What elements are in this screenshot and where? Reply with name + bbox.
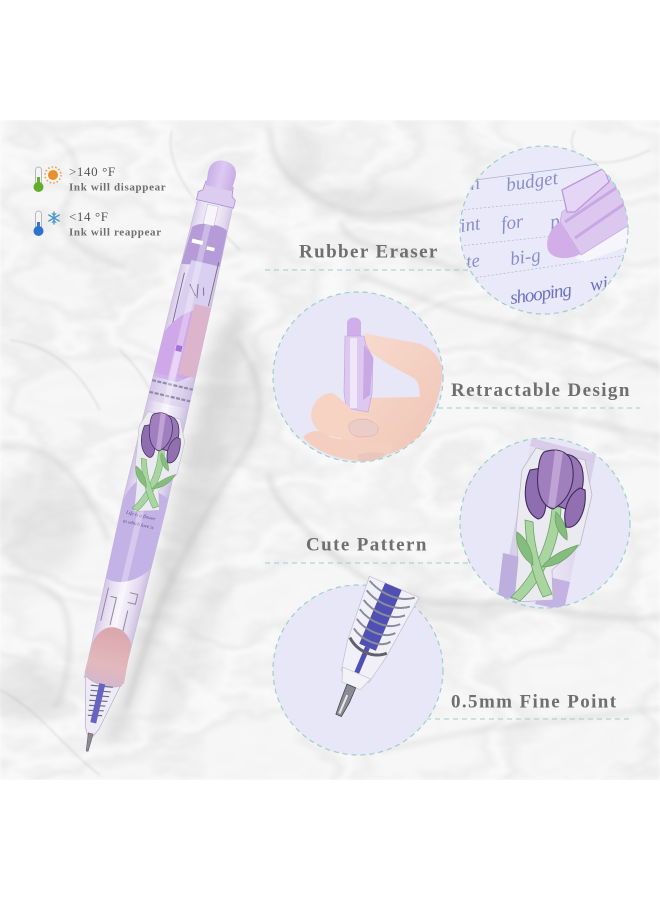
pen peach strip xyxy=(178,304,212,378)
handwriting xyxy=(461,173,606,304)
metal point xyxy=(334,684,356,717)
full pen xyxy=(84,160,236,752)
heading: above 140 F: >140 °F xyxy=(69,164,116,179)
handwriting: bi-g xyxy=(509,245,542,270)
dashed leader lines xyxy=(265,270,640,719)
notebook paper xyxy=(459,146,634,314)
heading: below 14 F: <14 °F xyxy=(69,209,109,224)
circle: cute pattern xyxy=(460,438,630,610)
circle: retractable design xyxy=(273,292,443,462)
handwriting: shooping xyxy=(509,280,573,309)
pen shadow xyxy=(105,300,250,745)
handwriting: budget xyxy=(505,168,560,196)
icon: snowflake xyxy=(49,212,59,224)
pen lilac panel xyxy=(174,260,217,318)
hand and thumb xyxy=(340,333,442,456)
lower fingernail xyxy=(358,452,385,461)
pen collar xyxy=(191,180,238,230)
icon: cold thermometer xyxy=(34,211,44,236)
marble background xyxy=(0,120,660,780)
pen end on paper xyxy=(547,165,634,258)
pen upper purple panel xyxy=(182,224,227,266)
pen mauve blob xyxy=(154,311,193,382)
pen lower purple blob xyxy=(106,482,168,582)
tulip close-up xyxy=(511,448,592,602)
barrel printed decoration xyxy=(100,224,227,632)
handwriting: for xyxy=(500,211,525,235)
text: ink will disappear: Ink will disappear xyxy=(69,182,166,194)
circle: fine point xyxy=(273,576,443,755)
handwriting: te xyxy=(465,250,481,273)
handwriting: int xyxy=(459,213,482,237)
collar xyxy=(337,667,370,692)
pen barrel xyxy=(81,199,236,687)
fingernail xyxy=(349,419,378,437)
pen spring xyxy=(83,681,113,725)
handwriting: n xyxy=(469,173,481,195)
handwriting: p xyxy=(547,211,561,233)
pen highlight xyxy=(121,224,211,582)
circle: rubber eraser xyxy=(459,146,634,314)
handwriting: wi xyxy=(589,273,609,296)
shadow below eraser xyxy=(576,227,628,262)
label: fine point: 0.5mm Fine Point xyxy=(451,692,617,712)
pen small print: Life is a flower xyxy=(124,511,156,523)
pen lower doodle xyxy=(99,588,138,635)
retractable pen xyxy=(344,318,373,412)
legend: temperature behaviour xyxy=(34,164,166,238)
pen small print xyxy=(123,510,156,530)
icon: hot thermometer xyxy=(34,167,44,192)
pen small print: to which love is xyxy=(122,519,154,531)
pen tulip decoration xyxy=(132,411,185,512)
pen close-up xyxy=(498,438,596,610)
text: ink will reappear: Ink will reappear xyxy=(69,226,162,238)
pen metal point xyxy=(84,733,93,752)
dashed outline xyxy=(460,146,628,314)
pen printed letters band xyxy=(149,380,194,402)
spring coils xyxy=(343,579,415,662)
pen pink grip xyxy=(82,623,136,691)
middle finger xyxy=(303,431,393,461)
index finger xyxy=(311,393,378,438)
pen spring tip cone xyxy=(73,676,121,740)
label: cute pattern: Cute Pattern xyxy=(306,534,428,556)
pen eraser xyxy=(205,158,239,191)
barrel tip xyxy=(315,576,419,726)
label: rubber eraser: Rubber Eraser xyxy=(299,242,439,262)
label: retractable design: Retractable Design xyxy=(451,380,631,401)
pen ink window xyxy=(168,345,184,381)
ink refill xyxy=(359,583,402,651)
icon: sun xyxy=(45,167,61,183)
